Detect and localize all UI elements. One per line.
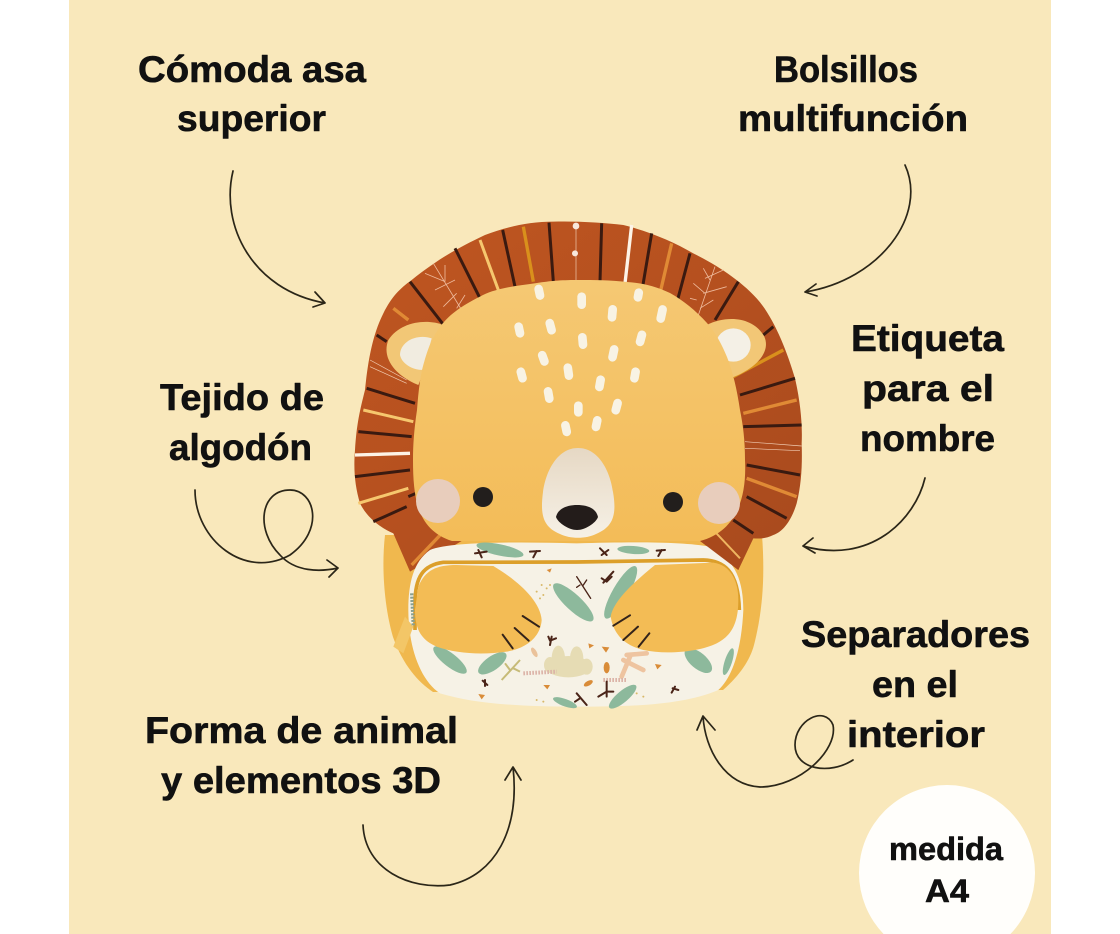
illustration: lion backpack bbox=[354, 222, 802, 712]
arrow: pockets bbox=[805, 165, 911, 296]
zipper pull bbox=[393, 617, 413, 653]
badge: medida A4: A4 bbox=[925, 873, 969, 909]
left claws bbox=[503, 616, 539, 648]
label: etiqueta para el nombre: para el bbox=[862, 368, 994, 409]
right mane strap bbox=[697, 527, 742, 570]
label: etiqueta para el nombre: nombre bbox=[860, 418, 995, 459]
lion face bbox=[413, 280, 745, 541]
backpack body bbox=[383, 535, 763, 692]
badge: medida A4: medida bbox=[889, 831, 1003, 867]
feather marks bbox=[425, 263, 727, 320]
label: tejido de algodón bbox=[160, 377, 324, 468]
right ear bbox=[707, 319, 766, 378]
label: separadores en el interior: en el bbox=[872, 664, 958, 705]
label: etiqueta para el nombre: Etiqueta bbox=[851, 318, 1004, 359]
label: etiqueta para el nombre bbox=[851, 318, 1004, 459]
arrow: animal shape bbox=[363, 767, 521, 886]
label: bolsillos multifunción bbox=[738, 49, 968, 139]
label: cómoda asa superior: superior bbox=[177, 98, 326, 139]
beige flower bbox=[544, 646, 593, 677]
right claws bbox=[613, 615, 649, 647]
label: bolsillos multifunción: Bolsillos bbox=[774, 49, 918, 90]
arrow: name tag bbox=[803, 478, 925, 553]
pocket bbox=[393, 527, 743, 712]
label: cómoda asa superior bbox=[138, 49, 366, 139]
arrow: separators bbox=[697, 716, 853, 787]
label: tejido de algodón: algodón bbox=[169, 427, 312, 468]
forehead dots bbox=[513, 284, 668, 437]
badge: medida A4 bbox=[859, 785, 1035, 934]
left ear bbox=[386, 322, 443, 385]
twigs bbox=[475, 548, 678, 705]
label: cómoda asa superior: Cómoda asa bbox=[138, 49, 366, 90]
label: bolsillos multifunción: multifunción bbox=[738, 98, 968, 139]
eyes bbox=[473, 487, 683, 512]
label: separadores en el interior: interior bbox=[847, 714, 985, 755]
zipper bbox=[415, 560, 739, 630]
label: separadores en el interior bbox=[801, 614, 1030, 755]
label: forma de animal y elementos 3D: y elementos 3D bbox=[161, 760, 441, 801]
mane stripes bbox=[355, 223, 802, 565]
left paw bbox=[415, 565, 542, 653]
label: forma de animal y elementos 3D bbox=[145, 710, 458, 801]
right paw bbox=[611, 563, 738, 652]
arrow: handle bbox=[230, 171, 325, 307]
arrow: fabric bbox=[195, 490, 338, 577]
nose bbox=[556, 505, 598, 530]
leaf pattern bbox=[430, 539, 736, 712]
cheeks bbox=[416, 479, 740, 524]
label: tejido de algodón: Tejido de bbox=[160, 377, 324, 418]
label: separadores en el interior: Separadores bbox=[801, 614, 1030, 655]
lion mane bbox=[354, 222, 802, 572]
label: forma de animal y elementos 3D: Forma de animal bbox=[145, 710, 458, 751]
snout bbox=[542, 448, 614, 538]
